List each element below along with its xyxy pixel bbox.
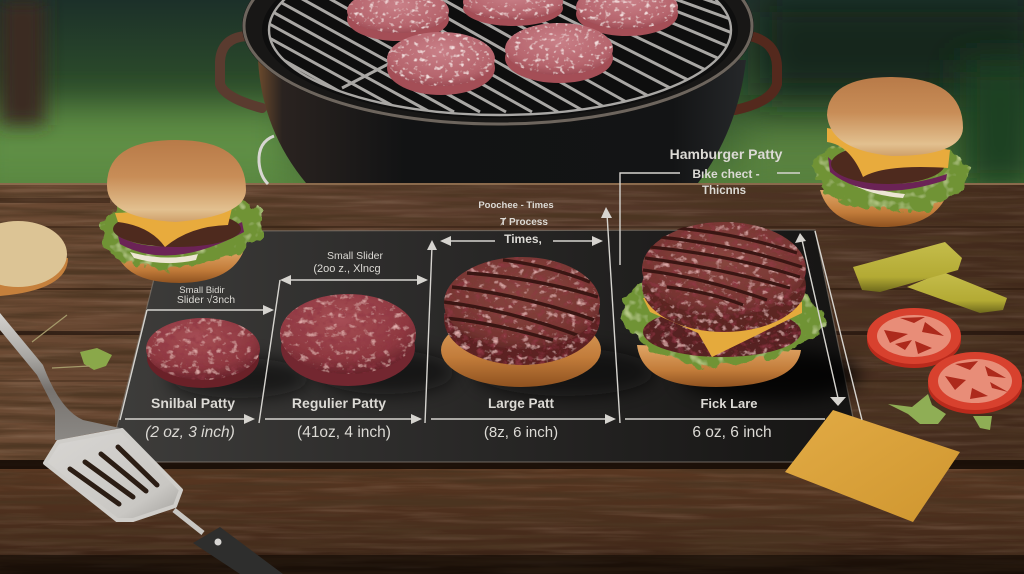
grill leg ring	[259, 136, 274, 184]
grill bowl	[258, 60, 746, 183]
tomato slices	[867, 308, 1022, 414]
bun slice	[0, 221, 68, 296]
top-right burger	[812, 77, 972, 227]
label: process times	[478, 200, 554, 246]
heading: hamburger patty chart	[670, 146, 783, 197]
grill rim	[242, 0, 754, 126]
labels: large patty: (8z, 6 inch)	[484, 424, 558, 441]
chart arrows and guide lines	[120, 173, 862, 424]
label: small slider upper: Small Slider	[327, 250, 384, 262]
labels: thick patty: 6 oz, 6 inch	[692, 424, 772, 441]
thick patty burger with lettuce and cheese	[622, 222, 826, 387]
label: small slider upper: (2oo z., Xlncg	[313, 263, 381, 275]
labels: regular patty: (41oz, 4 inch)	[297, 424, 391, 441]
spatula	[0, 313, 283, 574]
label: small slider upper	[313, 250, 384, 275]
labels: large patty: Large Patt	[488, 396, 555, 411]
labels: regular patty: Regulier Patty	[292, 395, 386, 411]
charcoal grill	[220, 0, 777, 184]
label: process times: Poochee - Times	[478, 200, 554, 211]
size chart mat	[108, 230, 862, 462]
grill handles	[220, 36, 777, 110]
label: small slider lower	[177, 285, 235, 306]
labels: regular patty	[292, 395, 391, 441]
wooden table	[0, 183, 1024, 574]
heading: hamburger patty chart: Bıke chect -	[692, 167, 760, 181]
regular patty	[280, 294, 416, 386]
background: blurred garden lawn	[0, 0, 1024, 190]
small patty	[146, 318, 260, 388]
label: small slider lower: Small Bidir	[179, 285, 225, 296]
labels: thick patty: Fick Lare	[700, 396, 758, 411]
pickles	[853, 242, 1007, 313]
cheese slice	[785, 410, 960, 522]
large patty on bun	[441, 257, 601, 387]
top-left slider burger	[100, 140, 262, 283]
labels: large patty	[484, 396, 558, 441]
label: process times: Times,	[504, 232, 542, 246]
heading: hamburger patty chart: Thicnns	[702, 185, 746, 197]
labels: small patty	[145, 395, 235, 441]
patties on the grill	[347, 0, 678, 95]
heading: hamburger patty chart: Hamburger Patty	[670, 146, 783, 162]
label: small slider lower: Slider √3nch	[177, 294, 235, 306]
grill grate	[262, 0, 748, 112]
label: process times: Ⱦ Process	[500, 217, 548, 228]
lettuce garnishes	[32, 315, 992, 430]
labels: small patty: (2 oz, 3 inch)	[145, 424, 235, 441]
labels: small patty: Snilbal Patty	[151, 395, 235, 411]
labels: thick patty	[692, 396, 772, 441]
